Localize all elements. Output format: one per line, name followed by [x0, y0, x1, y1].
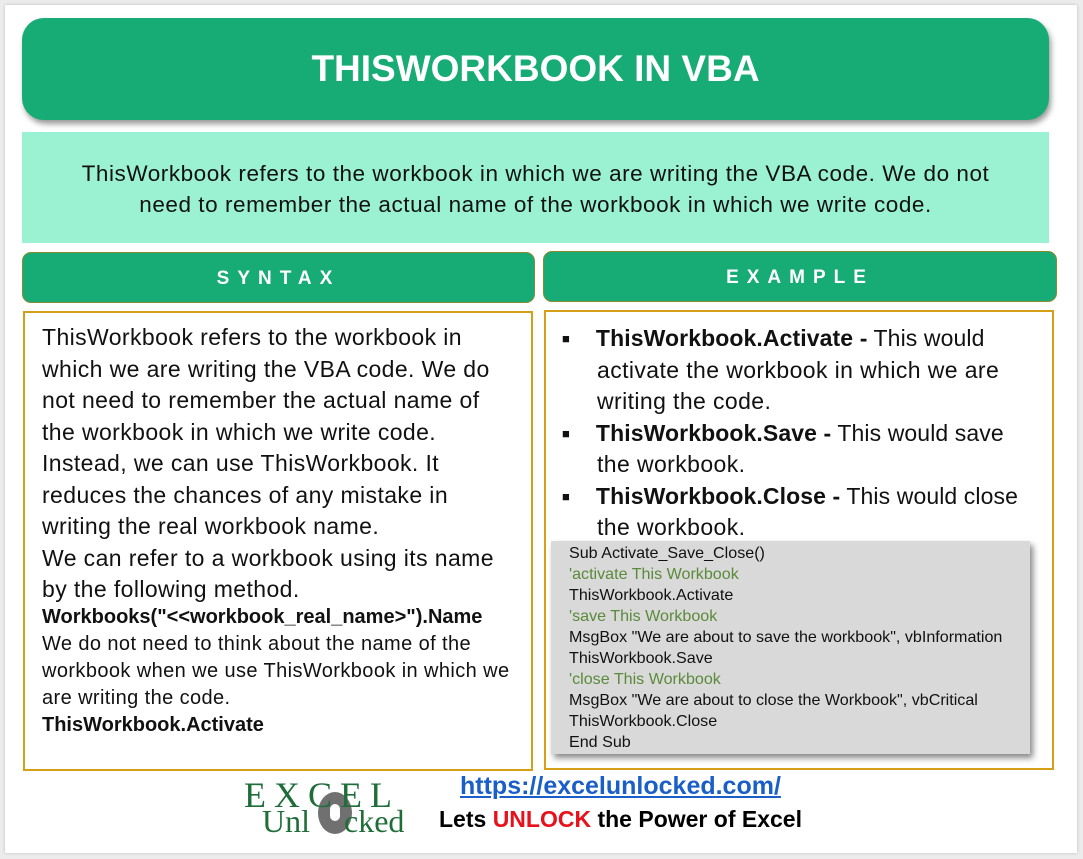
syntax text: are writing the code. — [42, 686, 230, 708]
syntax text: We do not need to think about the name of the — [42, 632, 471, 654]
syntax text: ThisWorkbook refers to the workbook in — [42, 324, 462, 350]
icon: lock — [318, 792, 352, 834]
code block: MsgBox "We are about to save the workbook", vbInformation — [569, 628, 1002, 646]
code block: 'save This Workbook — [569, 607, 717, 625]
example bullets: ■ ThisWorkbook.Save - This would save — [562, 420, 1004, 446]
logo: EXCEL — [244, 775, 400, 815]
title: THISWORKBOOK IN VBA — [311, 48, 760, 89]
logo: Unl cked — [262, 803, 404, 839]
syntax text: by the following method. — [42, 576, 300, 602]
url link: https://excelunlocked.com/ — [460, 772, 781, 800]
syntax text: the workbook in which we write code. — [42, 418, 436, 444]
panel: example — [544, 310, 1054, 770]
example bullets: the workbook. — [597, 451, 745, 477]
tagline: Lets UNLOCK the Power of Excel — [439, 806, 802, 832]
logo — [244, 775, 404, 839]
syntax text: We can refer to a workbook using its name — [42, 544, 494, 570]
code block: End Sub — [569, 733, 631, 751]
heading: example: EXAMPLE — [726, 267, 874, 288]
code block: ThisWorkbook.Close — [569, 712, 717, 730]
syntax text: ThisWorkbook.Activate — [42, 714, 264, 736]
code block: ThisWorkbook.Save — [569, 649, 713, 667]
example bullets: the workbook. — [597, 514, 745, 540]
heading: example — [543, 251, 1057, 302]
description banner — [22, 132, 1049, 243]
code block: MsgBox "We are about to close the Workbook", vbCritical — [569, 691, 978, 709]
example bullets — [562, 325, 1018, 540]
syntax text: which we are writing the VBA code. We do — [42, 356, 490, 382]
syntax text: reduces the chances of any mistake in — [42, 482, 448, 508]
example bullets: ■ ThisWorkbook.Close - This would close — [562, 482, 1018, 508]
syntax text: Instead, we can use ThisWorkbook. It — [42, 450, 439, 476]
syntax text: writing the real workbook name. — [42, 513, 379, 539]
code block: 'activate This Workbook — [569, 565, 739, 583]
panel: syntax — [23, 311, 533, 771]
title — [22, 18, 1049, 120]
example bullets: writing the code. — [597, 388, 771, 414]
example bullets: activate the workbook in which we are — [597, 356, 999, 382]
syntax text: not need to remember the actual name of — [42, 387, 480, 413]
heading: syntax: SYNTAX — [217, 268, 340, 289]
example bullets: ■ ThisWorkbook.Activate - This would — [562, 325, 984, 351]
heading: syntax — [22, 252, 535, 303]
description banner: need to remember the actual name of the workbook in which we write code. — [139, 192, 932, 217]
description banner: ThisWorkbook refers to the workbook in which we are writing the VBA code. We do not — [82, 161, 989, 186]
syntax text: Workbooks("<<workbook_real_name>").Name — [42, 606, 482, 628]
code block — [551, 541, 1030, 754]
syntax text: workbook when we use ThisWorkbook in which we — [42, 660, 509, 682]
code block: 'close This Workbook — [569, 670, 721, 688]
syntax text — [42, 324, 509, 736]
code block: ThisWorkbook.Activate — [569, 586, 733, 604]
code block: Sub Activate_Save_Close() — [569, 544, 765, 562]
